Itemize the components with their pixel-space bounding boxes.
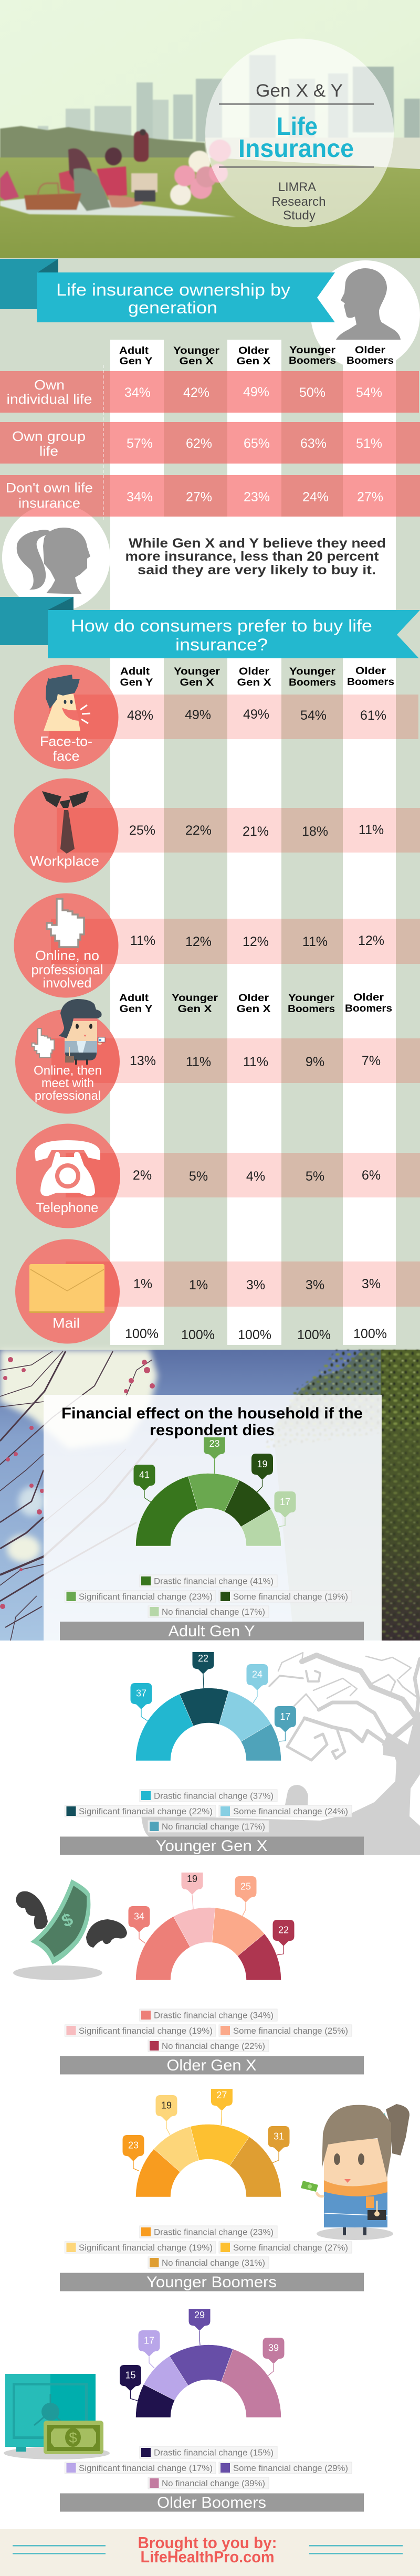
ribbon heading: ownership by generation: Life insurance ownership by	[56, 280, 290, 299]
callout text: very likely to buy: more insurance, less than 20 percent	[125, 549, 379, 564]
legend	[65, 2226, 352, 2268]
data pins: 27	[216, 2090, 227, 2100]
data pins: 19	[161, 2100, 172, 2110]
title line: Gen X & Y: Gen X & Y	[256, 81, 343, 101]
legend: No financial change (31%)	[162, 2258, 265, 2268]
row: own individual life: 42%	[183, 385, 209, 400]
table headers: first preference group: Adult	[120, 666, 150, 677]
row: don't own life insurance: 23%	[244, 490, 270, 504]
row: mail: 1%	[189, 1278, 208, 1292]
title: Life Insurance	[238, 113, 354, 163]
background panel: sage table area	[0, 258, 420, 1350]
illustration: girl holding money	[301, 2104, 410, 2240]
row: own group life: 57%	[127, 436, 153, 451]
chart title: financial effect: respondent dies	[150, 1422, 275, 1439]
callout text: very likely to buy: said they are very likely to buy it.	[138, 563, 376, 577]
icon: man silhouette	[336, 268, 401, 340]
data pins: 23	[209, 1438, 220, 1449]
row: online, then meet with professional: 13%	[130, 1054, 156, 1068]
legend: No financial change (22%)	[162, 2041, 265, 2051]
panel: translucent chart background	[44, 1395, 382, 1641]
label bar: Younger Boomers	[146, 2274, 277, 2291]
row: telephone: 6%	[362, 1168, 381, 1183]
label bar: Older Gen X	[167, 2057, 256, 2074]
table headers: second preference group	[119, 992, 392, 1015]
row: telephone: Telephone	[36, 1200, 99, 1215]
chart: Younger Boomers	[60, 2089, 364, 2291]
icon: pointer hand	[47, 899, 84, 947]
column headers: Older	[355, 345, 386, 356]
legend: Drastic financial change (37%)	[154, 1791, 274, 1801]
data pins: 17	[280, 1497, 290, 1507]
white table columns	[110, 340, 396, 1345]
label bar: Younger Gen X	[155, 1837, 268, 1855]
ribbon heading: ownership by generation	[0, 259, 335, 322]
row: online, no professional involved	[32, 899, 384, 991]
row: telephone	[35, 1140, 381, 1215]
column headers: Boomers	[289, 355, 336, 366]
row: online, no professional involved: 11%	[302, 934, 328, 949]
legend: Drastic financial change (23%)	[154, 2227, 274, 2237]
row: workplace: 21%	[243, 824, 269, 839]
column headers: Gen X	[236, 356, 271, 367]
row bands: purchase preferences	[49, 695, 420, 1307]
table headers: second preference group: Gen X	[236, 1004, 271, 1015]
row: face-to-face: Face-to-	[40, 733, 92, 749]
row: online, no professional involved: professional	[32, 962, 103, 977]
donut segments	[135, 1688, 281, 1761]
table headers: first preference group	[120, 666, 394, 688]
row: mail: Mail	[52, 1315, 80, 1331]
column headers: Adult	[119, 345, 149, 356]
hero photo: picnic in the park	[0, 0, 420, 258]
data pins	[133, 1437, 296, 1527]
label bar	[60, 2494, 364, 2511]
row: face-to-face: 48%	[127, 708, 153, 723]
row: totals: 100%	[353, 1327, 387, 1341]
table headers: second preference group: Older	[353, 992, 384, 1003]
row: online, no professional involved: 12%	[185, 934, 212, 949]
table headers: first preference group: Younger	[289, 666, 336, 677]
row: own group life: 63%	[300, 436, 327, 451]
column headers: Older	[238, 345, 269, 356]
callout text: very likely to buy: While Gen X and Y believe they need	[129, 536, 386, 551]
white circle behind man silhouette	[311, 260, 420, 370]
label bar	[60, 1836, 364, 1855]
table headers: first preference group: Older	[239, 666, 270, 677]
row: don't own life insurance: 24%	[302, 490, 329, 504]
row: workplace: 11%	[359, 823, 384, 837]
row: online, then meet with professional: meet with	[41, 1076, 94, 1090]
legend	[65, 2446, 352, 2489]
table headers: first preference group: Gen Y	[120, 677, 153, 688]
ribbon heading: ownership by generation: generation	[128, 298, 217, 317]
data pins: 31	[274, 2131, 284, 2142]
data pins: 37	[136, 1688, 146, 1699]
footer: brought to you by	[0, 2529, 420, 2576]
row: mail: 3%	[246, 1278, 265, 1292]
table headers: second preference group: Gen X	[177, 1004, 212, 1015]
row: own individual life: 34%	[124, 385, 151, 400]
legend: Significant financial change (23%)	[79, 1592, 213, 1602]
row: online, no professional involved: involved	[43, 975, 91, 991]
legend	[65, 1575, 352, 1617]
row: don't own life insurance: 27%	[357, 490, 383, 504]
row: face-to-face	[40, 675, 386, 764]
donut segments	[135, 1474, 281, 1546]
legend: Drastic financial change (34%)	[154, 2011, 274, 2020]
illustration: money with wings: $	[59, 1909, 76, 1931]
row: telephone: 5%	[306, 1169, 324, 1184]
data pins: 24	[252, 1669, 262, 1680]
footer: brought to you by: LifeHealthPro.com	[141, 2548, 274, 2566]
data pins: 41	[139, 1470, 150, 1480]
title badge: translucent circle with title	[205, 39, 394, 227]
chart: Adult Gen Y	[60, 1437, 364, 1640]
donut segments	[135, 1907, 281, 1980]
row: totals	[125, 1327, 387, 1342]
column headers: Boomers	[346, 355, 394, 366]
ribbon heading: how consumers prefer to buy: How do consumers prefer to buy life	[71, 616, 372, 635]
title: Life Insurance: Insurance	[238, 135, 354, 163]
row: telephone: 2%	[133, 1168, 152, 1183]
row: own individual life: Own	[34, 377, 65, 393]
subtitle: LIMRA Research Study: Research	[272, 195, 326, 209]
data pins: 17	[280, 1711, 290, 1722]
legend: Some financial change (27%)	[233, 2243, 348, 2253]
row: mail: 3%	[306, 1278, 324, 1292]
row bands	[0, 371, 420, 517]
table headers: second preference group: Younger	[172, 993, 218, 1004]
row: mail: 1%	[133, 1277, 152, 1291]
row: don't own life insurance: Don't own life	[6, 480, 93, 496]
row: own group life: 65%	[244, 436, 270, 451]
icon: woman silhouette	[17, 528, 90, 594]
legend: Significant financial change (22%)	[79, 1806, 213, 1816]
table headers: first preference group: Younger	[174, 666, 220, 677]
row: face-to-face: face	[52, 748, 80, 764]
legend: No financial change (17%)	[162, 1822, 265, 1832]
icon: envelope	[29, 1264, 104, 1313]
table headers: second preference group: Younger	[288, 993, 335, 1004]
subtitle: LIMRA Research Study: LIMRA	[278, 180, 316, 194]
data pins: 25	[240, 1881, 251, 1892]
legend: No financial change (17%)	[162, 1607, 265, 1617]
icon: talking man	[44, 675, 90, 731]
illustration: safe and cash	[4, 2374, 110, 2459]
row: own group life: Own group	[12, 428, 86, 444]
illustration: safe and cash: $	[69, 2430, 77, 2446]
row: online, then meet with professional: 11%	[243, 1055, 268, 1069]
data pins: 22	[198, 1653, 208, 1664]
row: don't own life insurance: 27%	[186, 490, 212, 504]
legend: Some financial change (29%)	[233, 2463, 348, 2473]
row: online, then meet with professional: 9%	[306, 1055, 324, 1069]
table headers: first preference group: Boomers	[289, 677, 336, 688]
label bar	[60, 2273, 364, 2291]
row: own individual life: 54%	[356, 385, 382, 400]
table headers: second preference group: Older	[238, 993, 269, 1004]
method circles	[14, 665, 120, 1344]
icon: pointer hand small	[32, 1028, 54, 1057]
column headers: Younger	[173, 345, 220, 356]
row: totals: 100%	[125, 1327, 159, 1341]
row: online, no professional involved: 12%	[358, 933, 384, 948]
row: face-to-face: 49%	[243, 707, 269, 722]
data pins	[120, 2309, 285, 2401]
row: telephone: 5%	[189, 1169, 208, 1184]
table headers: second preference group: Boomers	[345, 1003, 392, 1014]
row: online, then meet with professional: professional	[35, 1089, 101, 1103]
legend	[65, 1790, 352, 1832]
table headers: first preference group: Boomers	[347, 677, 394, 688]
row: totals: 100%	[181, 1328, 215, 1342]
chart: Older Gen X	[60, 1873, 364, 2075]
legend: No financial change (39%)	[162, 2478, 265, 2488]
icon: rotary telephone	[35, 1140, 100, 1196]
table headers: first preference group: Gen X	[180, 677, 214, 688]
row: online, no professional involved: 12%	[243, 934, 269, 949]
data pins	[123, 2089, 290, 2171]
column headers	[119, 345, 394, 367]
row: own group life	[12, 428, 382, 459]
table headers: first preference group: Older	[355, 666, 386, 677]
data pins	[130, 1652, 296, 1741]
data pins: 23	[128, 2140, 139, 2150]
label bar: Older Boomers	[157, 2494, 266, 2511]
row: face-to-face: 54%	[300, 708, 327, 723]
column headers: Gen Y	[120, 356, 153, 367]
data pins: 17	[144, 2335, 154, 2346]
label bar	[60, 2056, 364, 2075]
table headers: second preference group: Gen Y	[120, 1004, 153, 1015]
row: own group life: 51%	[356, 436, 382, 451]
white circle behind woman silhouette	[2, 503, 110, 612]
column headers: Younger	[289, 345, 336, 356]
row: face-to-face: 61%	[360, 708, 386, 723]
row: totals: 100%	[297, 1328, 331, 1342]
row: own individual life: 50%	[299, 385, 326, 400]
chart title: financial effect: Financial effect on the household if the	[61, 1405, 363, 1422]
data pins: 22	[278, 1925, 289, 1935]
column headers: Gen X	[180, 356, 214, 367]
row: online, then meet with professional: 7%	[362, 1054, 381, 1068]
row: don't own life insurance: 34%	[127, 490, 153, 504]
table: life insurance ownership	[0, 345, 420, 520]
row: online, then meet with professional: 11%	[186, 1055, 211, 1069]
row: online, no professional involved: 11%	[130, 933, 155, 948]
row: online, then meet with professional: Online, then	[34, 1064, 102, 1078]
row: own group life: 62%	[186, 436, 212, 451]
row: don't own life insurance	[6, 480, 383, 511]
data pins: 34	[134, 1911, 144, 1921]
label bar	[60, 1622, 364, 1640]
row: own group life: life	[39, 443, 58, 459]
row: don't own life insurance: insurance	[18, 495, 80, 511]
label bar: Adult Gen Y	[168, 1623, 255, 1640]
row: own individual life: individual life	[6, 391, 92, 407]
data pins	[128, 1873, 294, 1955]
legend: Some financial change (25%)	[233, 2026, 348, 2036]
row: workplace: 18%	[302, 824, 328, 839]
row: online, then meet with professional	[32, 999, 381, 1103]
legend: Drastic financial change (41%)	[154, 1576, 274, 1586]
legend: Some financial change (24%)	[233, 1806, 348, 1816]
chart: Older Boomers	[60, 2309, 364, 2511]
donut segments	[135, 2345, 281, 2417]
row: workplace	[30, 791, 384, 869]
table headers: second preference group: Boomers	[288, 1004, 335, 1015]
ribbon heading: how consumers prefer to buy: insurance?	[175, 635, 268, 654]
donut segments	[135, 2124, 281, 2197]
row: telephone: 4%	[246, 1169, 265, 1184]
row: workplace: Workplace	[30, 853, 99, 869]
row: mail	[29, 1264, 381, 1331]
data pins: 19	[187, 1874, 197, 1884]
table headers: second preference group: Adult	[119, 993, 149, 1004]
legend: Drastic financial change (15%)	[154, 2447, 274, 2458]
chart title: financial effect	[61, 1405, 363, 1439]
legend: Significant financial change (17%)	[79, 2463, 213, 2473]
data pins: 29	[194, 2310, 205, 2320]
subtitle: LIMRA Research Study: Study	[283, 208, 316, 223]
data pins: 19	[257, 1459, 268, 1469]
legend: Some financial change (19%)	[233, 1592, 348, 1602]
row: workplace: 25%	[129, 823, 155, 838]
callout text: very likely to buy	[125, 536, 386, 577]
icon: businesswoman	[59, 999, 105, 1065]
title: Life Insurance: Life	[277, 113, 318, 141]
row: face-to-face: 49%	[185, 708, 211, 722]
row: online, no professional involved: Online, no	[35, 948, 99, 963]
data pins: 15	[125, 2370, 136, 2380]
table headers: first preference group: Gen X	[237, 677, 271, 688]
row: own individual life: 49%	[243, 385, 269, 399]
row: totals: 100%	[238, 1328, 271, 1342]
illustration: money with wings	[13, 1879, 127, 1980]
legend: Significant financial change (19%)	[79, 2026, 213, 2036]
row: own individual life	[6, 377, 382, 407]
row: workplace: 22%	[185, 823, 212, 838]
legend: Significant financial change (19%)	[79, 2243, 213, 2253]
footer: brought to you by: Brought to you by:	[138, 2533, 277, 2552]
subtitle: LIMRA Research Study	[272, 180, 326, 223]
ribbon heading: how consumers prefer to buy	[0, 597, 420, 658]
illustration: bare tree with gravestone	[141, 1653, 420, 1855]
data pins: 39	[268, 2342, 279, 2353]
icon: collar and tie	[42, 791, 89, 854]
background photo: sky and branches	[0, 1350, 420, 1641]
legend	[65, 2009, 352, 2052]
chart: Younger Gen X	[60, 1652, 364, 1855]
row: mail: 3%	[362, 1277, 381, 1291]
